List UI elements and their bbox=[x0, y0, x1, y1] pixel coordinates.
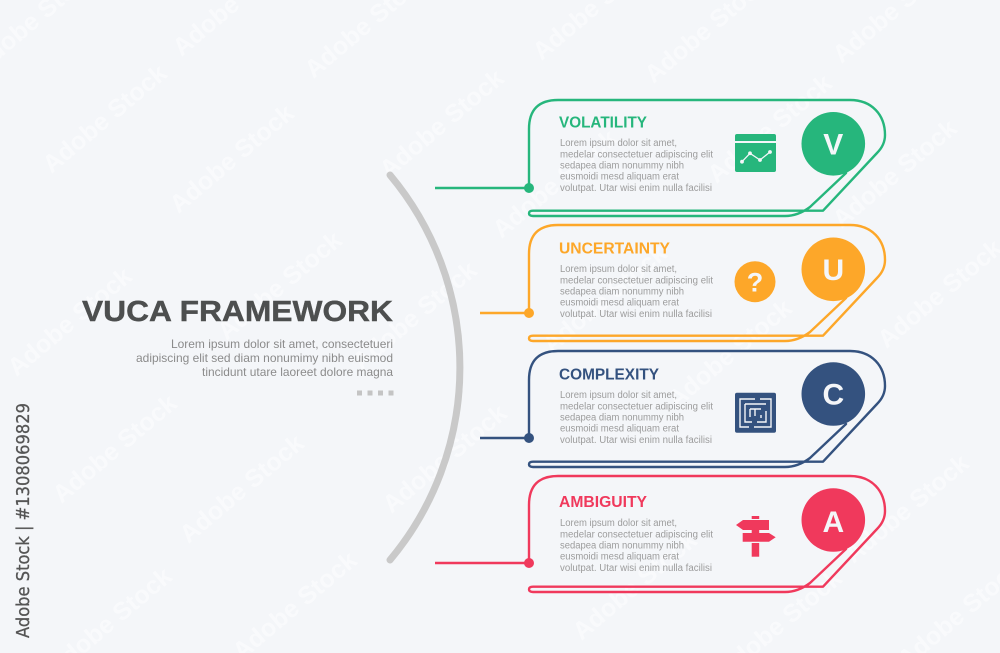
badge: A bbox=[802, 488, 865, 552]
panel: ambiguity: medelar consectetuer adipiscing elit bbox=[560, 530, 713, 540]
watermarks: Adobe Stock bbox=[212, 226, 347, 346]
watermarks: Adobe Stock bbox=[174, 429, 309, 549]
watermarks: Adobe Stock bbox=[164, 99, 299, 219]
badge: V: V bbox=[823, 128, 843, 162]
panel: volatility: volutpat. Utar wisi enim nulla facilisi bbox=[560, 183, 712, 194]
panel: uncertainty: sedapea diam nonummy nibh bbox=[560, 286, 684, 298]
badge: C: C bbox=[822, 379, 844, 412]
icon: chart window bbox=[735, 134, 776, 172]
watermarks: Adobe Stock bbox=[374, 64, 509, 184]
description bbox=[136, 337, 393, 379]
badge: V bbox=[802, 112, 865, 176]
watermarks: Adobe Stock bbox=[377, 399, 512, 519]
panel: volatility: VOLATILITY bbox=[559, 114, 647, 132]
panel: complexity: medelar consectetuer adipiscing elit bbox=[560, 402, 713, 412]
watermarks: Adobe Stock bbox=[662, 294, 797, 414]
panel: ambiguity: eusmoidi mesd aliquam erat bbox=[560, 552, 679, 562]
panel: ambiguity bbox=[435, 476, 885, 592]
watermarks: Adobe Stock bbox=[347, 256, 482, 376]
panel: uncertainty: UNCERTAINTY bbox=[559, 240, 670, 258]
panel: complexity: sedapea diam nonummy nibh bbox=[560, 412, 684, 424]
description: tincidunt utare laoreet dolore magna bbox=[202, 365, 393, 379]
icon: question mark bbox=[734, 261, 776, 302]
panel: complexity: COMPLEXITY bbox=[559, 366, 659, 384]
decorative dots bbox=[357, 390, 394, 396]
stock id label: Adobe Stock | #1308069829 bbox=[13, 403, 34, 638]
panel: volatility: Lorem ipsum dolor sit amet, bbox=[560, 138, 677, 149]
badge: C bbox=[802, 362, 865, 426]
panel: uncertainty: Lorem ipsum dolor sit amet, bbox=[560, 264, 677, 275]
watermarks: Adobe Stock bbox=[47, 389, 182, 509]
watermarks: Adobe Stock bbox=[537, 239, 672, 359]
panel: volatility: sedapea diam nonummy nibh bbox=[560, 160, 684, 172]
panel: volatility: medelar consectetuer adipiscing elit bbox=[560, 150, 713, 160]
panel: ambiguity: volutpat. Utar wisi enim nulla facilisi bbox=[560, 563, 712, 574]
panel: complexity: eusmoidi mesd aliquam erat bbox=[560, 424, 679, 434]
panel: ambiguity: AMBIGUITY bbox=[559, 494, 647, 511]
panel: uncertainty: volutpat. Utar wisi enim nulla facilisi bbox=[560, 309, 712, 320]
description: Lorem ipsum dolor sit amet, consectetueri bbox=[171, 337, 393, 351]
icon: question mark: ? bbox=[747, 268, 763, 298]
panel: uncertainty bbox=[480, 225, 885, 341]
panel: complexity: Lorem ipsum dolor sit amet, bbox=[560, 390, 677, 401]
watermarks: Adobe Stock bbox=[839, 449, 974, 569]
central arc bbox=[390, 175, 460, 560]
watermarks: Adobe Stock bbox=[37, 59, 172, 179]
panel: complexity: volutpat. Utar wisi enim nulla facilisi bbox=[560, 435, 712, 446]
panel: ambiguity: Lorem ipsum dolor sit amet, bbox=[560, 518, 677, 529]
panel: volatility bbox=[435, 100, 885, 216]
panel: complexity bbox=[480, 351, 885, 467]
watermarks: Adobe Stock bbox=[2, 262, 137, 382]
watermarks: Adobe Stock bbox=[827, 114, 962, 234]
icon: signpost bbox=[736, 516, 776, 557]
panel: ambiguity: sedapea diam nonummy nibh bbox=[560, 540, 684, 552]
panel: volatility: eusmoidi mesd aliquam erat bbox=[560, 172, 679, 182]
icon: maze bbox=[735, 393, 776, 433]
badge: U bbox=[802, 238, 865, 301]
watermarks: Adobe Stock bbox=[702, 69, 837, 189]
watermarks: Adobe Stock bbox=[487, 124, 622, 244]
panel: uncertainty: medelar consectetuer adipiscing elit bbox=[560, 276, 713, 286]
badge: A: A bbox=[822, 506, 844, 539]
badge: U: U bbox=[822, 254, 844, 287]
description: adipiscing elit sed diam nonumimy nibh euismod bbox=[136, 351, 393, 365]
watermarks: Adobe Stock bbox=[567, 526, 702, 646]
title: VUCA FRAMEWORK bbox=[82, 296, 393, 328]
panel: uncertainty: eusmoidi mesd aliquam erat bbox=[560, 298, 679, 308]
